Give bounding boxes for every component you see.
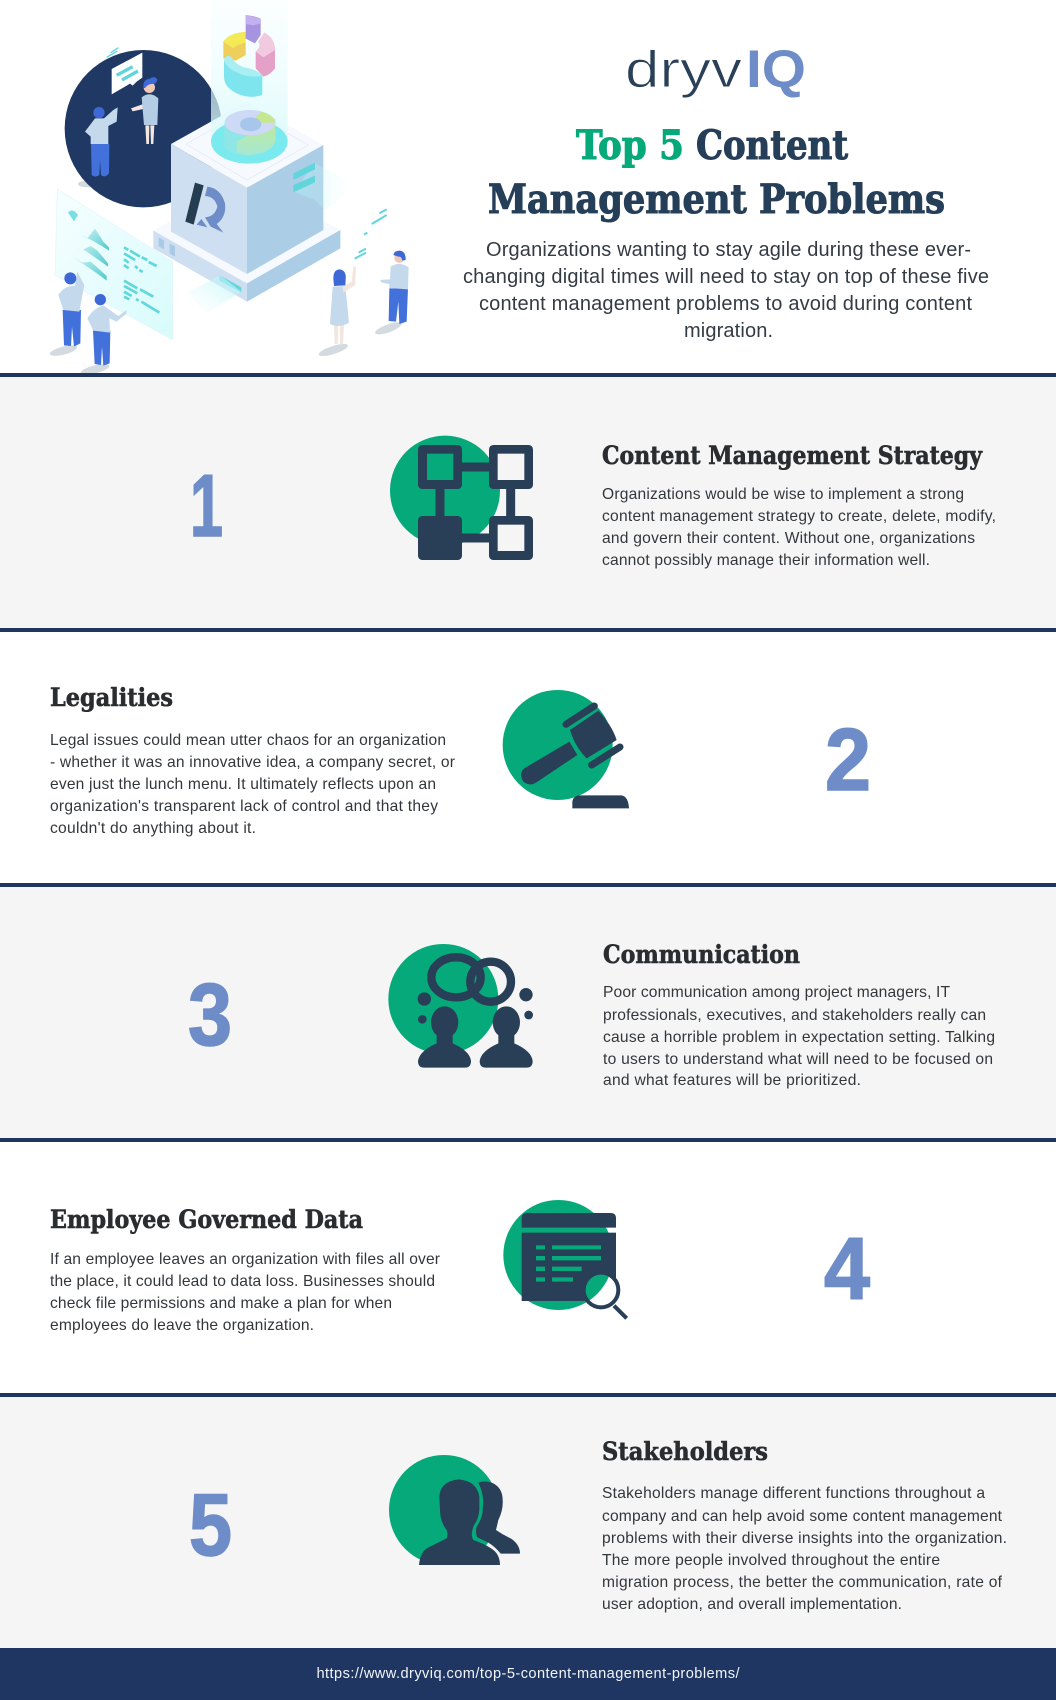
panel: problem 3 <box>0 887 1056 1138</box>
floating donut chart <box>223 15 275 97</box>
server cube <box>153 102 340 302</box>
speech bubble <box>107 48 142 94</box>
cube logo mark <box>185 183 225 233</box>
icon: stakeholders <box>389 1455 520 1565</box>
body text: Stakeholders manage different functions throughout a <box>602 1485 985 1502</box>
body text: Poor communication among project managers, IT <box>603 984 950 1001</box>
hologram column <box>211 0 288 164</box>
body text <box>50 1251 440 1334</box>
title: Content <box>696 122 848 169</box>
number 4: 4 <box>824 1219 870 1318</box>
body text: Organizations would be wise to implement a strong <box>602 486 964 503</box>
body text: cannot possibly manage their information well. <box>602 552 930 569</box>
heading: Stakeholders <box>602 1437 768 1466</box>
data dashes <box>355 209 387 259</box>
logo: dryvIQ <box>625 40 806 99</box>
body text: check file permissions and make a plan for when <box>50 1295 392 1312</box>
body text: and what features will be prioritized. <box>603 1072 861 1089</box>
icon: gavel <box>503 690 629 808</box>
light beams <box>187 163 353 313</box>
number 2: 2 <box>825 710 871 809</box>
body text: company and can help avoid some content management <box>602 1508 1003 1525</box>
panel: problem 2 <box>0 632 1056 883</box>
screen panel with charts <box>55 189 173 340</box>
body text <box>603 984 995 1089</box>
illustration: isometric data cube and people <box>49 0 409 377</box>
person: woman on circle <box>131 77 158 144</box>
panel: header <box>49 0 989 377</box>
body text <box>602 486 996 569</box>
body text: and govern their content. Without one, organizations <box>602 530 975 547</box>
icon: communication <box>388 944 533 1068</box>
body text: couldn't do anything about it. <box>50 820 256 837</box>
body text: user adoption, and overall implementation. <box>602 1596 902 1613</box>
body text: The more people involved throughout the entire <box>602 1552 940 1569</box>
panel: problem 4 <box>50 1200 870 1334</box>
body text <box>602 1485 1007 1613</box>
pie chart on cube <box>224 110 275 155</box>
intro text <box>463 239 989 342</box>
heading: Content Management Strategy <box>602 441 983 470</box>
body text: to users to understand what will need to be focused on <box>603 1051 993 1068</box>
number 5: 5 <box>189 1475 232 1574</box>
person: man on circle <box>85 107 118 177</box>
body text: employees do leave the organization. <box>50 1317 314 1334</box>
panel: problem 5 <box>0 1397 1056 1648</box>
person: woman right <box>318 267 356 359</box>
shadow behind circle <box>78 181 97 187</box>
footer <box>0 1648 1056 1700</box>
heading: Legalities <box>50 683 173 712</box>
body text: - whether it was an innovative idea, a company secret, or <box>50 754 455 771</box>
heading: Communication <box>603 940 800 969</box>
number 1: 1 <box>190 456 223 555</box>
intro text: migration. <box>684 320 773 342</box>
body text: If an employee leaves an organization with files all over <box>50 1251 440 1268</box>
title: Management Problems <box>488 176 945 223</box>
body text: problems with their diverse insights into the organization. <box>602 1530 1007 1547</box>
body text: professionals, executives, and stakeholders really can <box>603 1007 986 1024</box>
intro text: changing digital times will need to stay on top of these five <box>463 266 989 288</box>
heading: Employee Governed Data <box>50 1205 363 1234</box>
body text: migration process, the better the communication, rate of <box>602 1574 1003 1591</box>
panel: problem 1 <box>0 377 1056 628</box>
body text: organization's transparent lack of control and that they <box>50 798 438 815</box>
person: man right <box>374 251 409 337</box>
body text <box>50 732 455 837</box>
title <box>488 122 945 223</box>
title: Top 5 <box>576 122 684 169</box>
person: viewer right <box>80 294 127 377</box>
footer url: https://www.dryviq.com/top-5-content-management-problems/ <box>316 1666 740 1682</box>
dark circle <box>65 50 222 207</box>
body text: the place, it could lead to data loss. Businesses should <box>50 1273 435 1290</box>
logo: dryvIQ: dryv <box>625 41 742 99</box>
number 3: 3 <box>188 965 232 1064</box>
body text: Legal issues could mean utter chaos for an organization <box>50 732 446 749</box>
person: viewer left <box>49 272 84 358</box>
body text: cause a horrible problem in expectation setting. Talking <box>603 1029 995 1046</box>
logo: dryvIQ: IQ <box>746 40 806 99</box>
intro text: Organizations wanting to stay agile during these ever- <box>486 239 971 261</box>
icon: document search <box>503 1200 627 1318</box>
icon: strategy flowchart <box>390 436 533 560</box>
intro text: content management problems to avoid during content <box>479 293 972 315</box>
body text: content management strategy to create, delete, modify, <box>602 508 996 525</box>
body text: even just the lunch menu. It ultimately reflects upon an <box>50 776 436 793</box>
